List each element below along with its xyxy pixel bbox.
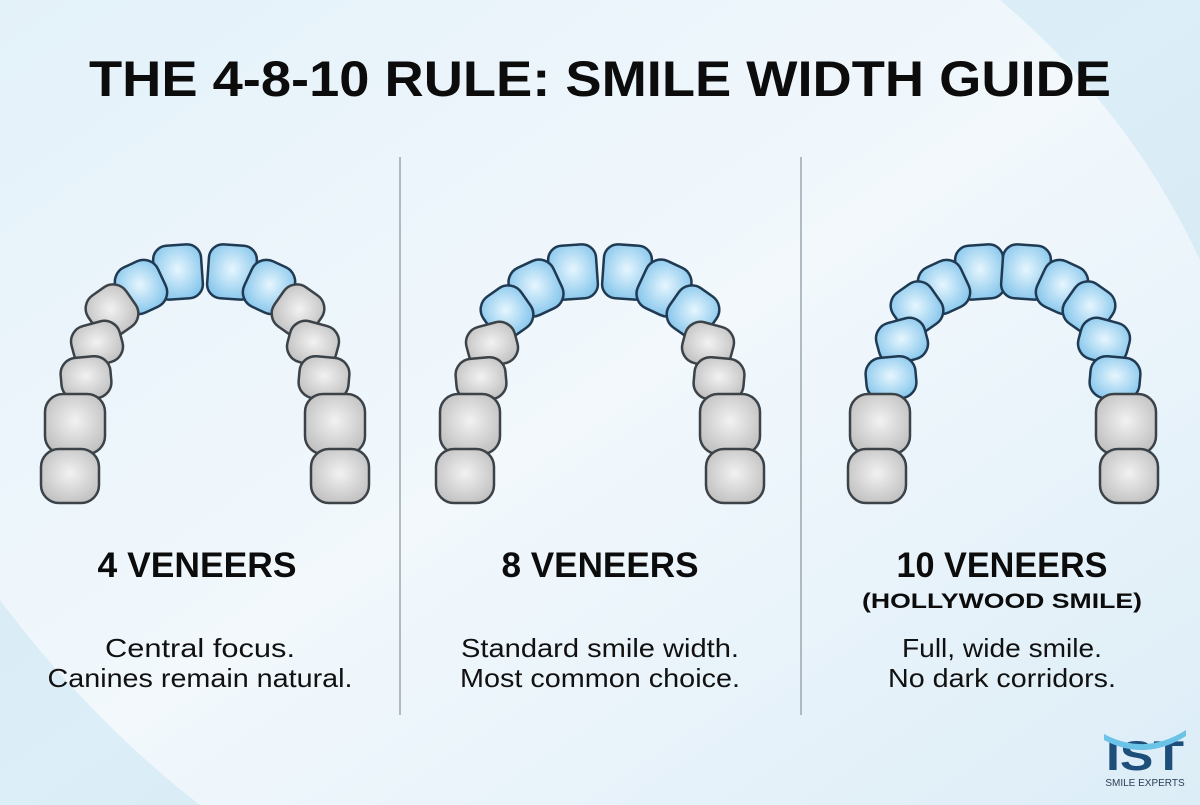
panel: 4 veneers <box>41 243 369 693</box>
description: Central focus. <box>105 633 295 663</box>
heading: 8 VENEERS <box>502 546 698 585</box>
panel: 8 veneers: Most common choice. <box>460 663 740 693</box>
description: Standard smile width. <box>461 633 739 663</box>
arch: 8 veneers <box>436 243 764 503</box>
heading: 10 VENEERS <box>896 546 1108 585</box>
panel: 8 veneers <box>436 243 764 693</box>
subheading: (HOLLYWOOD SMILE) <box>862 590 1142 613</box>
panel: 10 veneers <box>848 243 1158 693</box>
panel: 4 veneers: Canines remain natural. <box>48 663 352 693</box>
logo <box>1104 730 1186 789</box>
description: Full, wide smile. <box>902 633 1102 663</box>
logo: IST <box>1106 732 1184 779</box>
title: THE 4-8-10 RULE: SMILE WIDTH GUIDE <box>89 51 1111 107</box>
heading: 4 VENEERS <box>98 546 296 585</box>
panel: 10 veneers: No dark corridors. <box>888 663 1116 693</box>
arch: 10 veneers <box>848 243 1158 503</box>
arch: 4 veneers <box>41 243 369 503</box>
logo: SMILE EXPERTS <box>1105 778 1185 789</box>
